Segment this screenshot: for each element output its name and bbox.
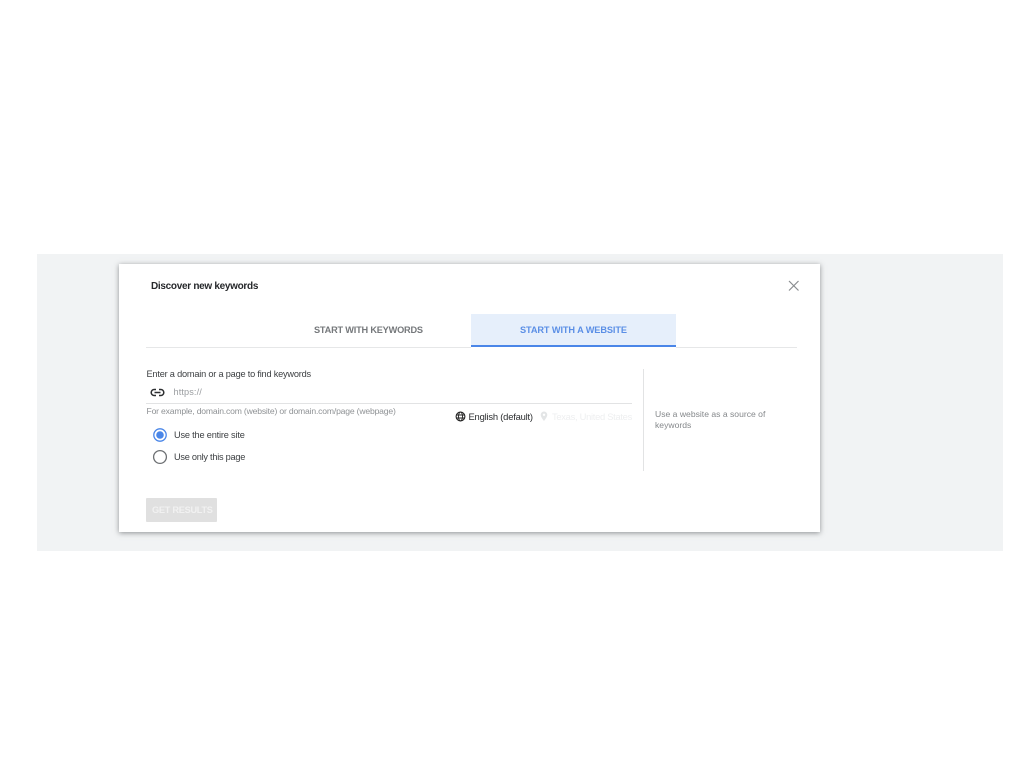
tab divider right bbox=[676, 346, 797, 348]
icon: link bbox=[150, 388, 164, 396]
icon: location pin bbox=[540, 412, 548, 421]
tab: start with a website: START WITH A WEBSITE bbox=[520, 324, 627, 334]
button: get results: GET RESULTS bbox=[152, 505, 213, 515]
input underline bbox=[146, 403, 632, 404]
icon: globe bbox=[456, 412, 466, 422]
icon: close bbox=[788, 280, 799, 291]
location label: Texas, United States bbox=[552, 410, 632, 422]
radio: entire site selected bbox=[153, 428, 167, 442]
input hint: For example, domain.com (website) or domain.com/page (webpage) bbox=[146, 406, 396, 416]
tab: start with keywords: START WITH KEYWORDS bbox=[314, 324, 423, 334]
background panel bbox=[37, 254, 1003, 551]
side help text: keywords bbox=[655, 420, 691, 430]
radio label: only this page: Use only this page bbox=[174, 452, 245, 462]
side help text: Use a website as a source of bbox=[655, 408, 765, 418]
side help text bbox=[655, 408, 766, 430]
radio: only this page bbox=[153, 450, 167, 464]
button: get results bbox=[146, 498, 217, 522]
input label: Enter a domain or a page to find keywords bbox=[146, 368, 311, 378]
input placeholder: https:// bbox=[174, 387, 202, 397]
title: Discover new keywords bbox=[151, 280, 258, 292]
tab divider bbox=[146, 346, 471, 348]
tab: start with a website bbox=[471, 314, 676, 347]
vertical divider bbox=[643, 369, 644, 471]
radio label: entire site: Use the entire site bbox=[174, 430, 245, 440]
dialog card bbox=[119, 264, 820, 532]
language label: English (default) bbox=[468, 410, 533, 422]
